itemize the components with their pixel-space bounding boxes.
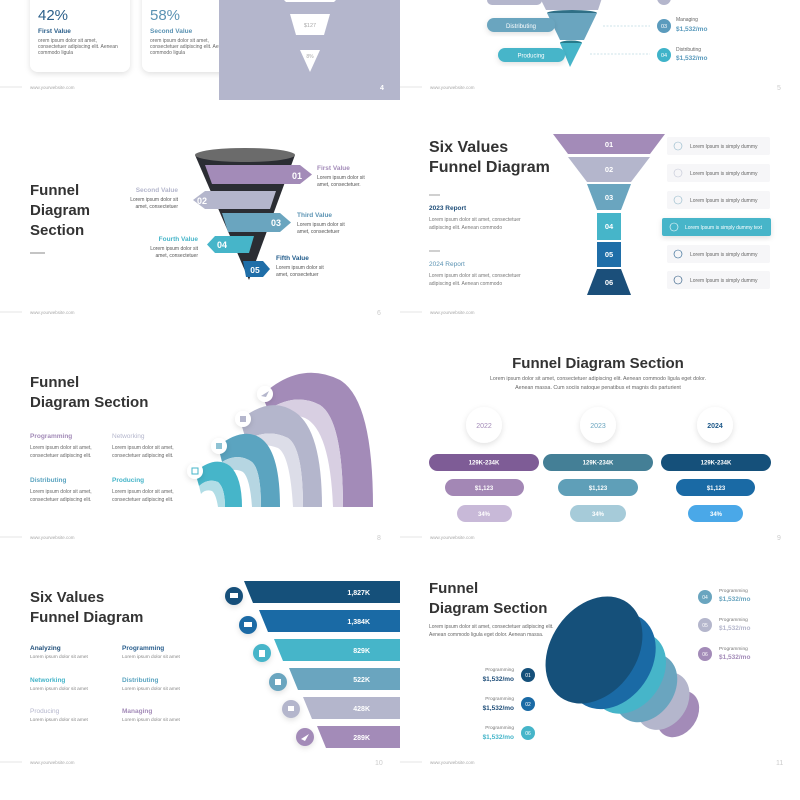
band 05: 05 <box>250 265 260 275</box>
arches <box>195 373 373 507</box>
labels: consectetuer adipiscing elit. <box>112 497 173 503</box>
title: Funnel Diagram Section <box>512 355 684 372</box>
bars: 289K <box>353 735 370 742</box>
title: Diagram <box>30 202 90 219</box>
pill: distributing: Distributing <box>506 24 536 30</box>
number circles: 05 <box>702 623 708 629</box>
card: first value: First Value <box>38 28 71 35</box>
slide 4: value cards <box>30 0 400 100</box>
panel: purple funnel <box>219 0 400 100</box>
footer 8: www.yourwebsite.com <box>30 535 75 540</box>
pills: 129K-234K <box>469 460 500 466</box>
number circles: 02 <box>525 702 531 708</box>
labels: Fifth Value <box>276 255 309 262</box>
labels: Lorem ipsum dolor sit amet <box>30 654 89 660</box>
title: Funnel Diagram <box>30 609 143 626</box>
pills: $1,123 <box>589 486 608 492</box>
footer 7 <box>400 310 475 315</box>
labels: amet, consectetuer <box>155 253 198 259</box>
pills <box>429 454 771 522</box>
title: Diagram Section <box>30 394 148 411</box>
year circles: 2023 <box>590 423 606 430</box>
number circles: 06 <box>525 731 531 737</box>
funnel segments: 05 <box>605 250 613 259</box>
labels: Lorem ipsum dolor sit amet, <box>30 489 92 495</box>
slide 5: funnel with pills <box>487 0 707 67</box>
labels: Programming <box>122 645 164 652</box>
footer 11: 11 <box>776 760 783 767</box>
footer 5 <box>400 85 781 92</box>
left items: Programming <box>485 696 514 702</box>
labels: Lorem ipsum dolor sit amet <box>122 717 181 723</box>
icons <box>187 386 273 479</box>
labels: Second Value <box>136 187 178 194</box>
item 03: 03 <box>661 24 667 30</box>
bars: 1,827K <box>347 590 370 597</box>
item 04 <box>657 47 707 62</box>
footer 8 <box>0 535 381 542</box>
labels: Distributing <box>122 677 158 684</box>
reports: Lorem ipsum dolor sit amet, consectetuer <box>429 217 521 223</box>
pills: $1,123 <box>707 486 726 492</box>
card: first value: orem ipsum dolor sit amet, <box>38 38 97 44</box>
bars: 522K <box>353 677 370 684</box>
list items <box>662 137 771 289</box>
pill: distributing <box>487 0 555 32</box>
card: first value: commodo ligula <box>38 50 73 56</box>
number circles <box>521 590 712 740</box>
title <box>429 139 550 176</box>
labels: First Value <box>317 165 350 172</box>
labels: Lorem ipsum dolor sit amet <box>30 686 89 692</box>
reports <box>429 195 521 287</box>
item 04: 04 <box>661 53 667 59</box>
labels: Programming <box>30 433 72 440</box>
title <box>30 589 143 626</box>
footer 5: www.yourwebsite.com <box>430 85 475 90</box>
title: Funnel <box>30 182 79 199</box>
footer 9: www.yourwebsite.com <box>430 535 475 540</box>
description: Aenean commodo ligula eget dolor. Aenean massa. <box>429 632 543 638</box>
bars: 428K <box>353 706 370 713</box>
left items: $1,532/mo <box>483 676 514 683</box>
item 04: Distributing <box>676 47 701 53</box>
slide 10 <box>30 581 400 748</box>
item 04: $1,532/mo <box>676 55 707 62</box>
title: Six Values <box>30 589 104 606</box>
funnel segments: 04 <box>605 222 614 231</box>
year circles: 2022 <box>476 423 492 430</box>
funnel segments: 01 <box>605 140 613 149</box>
left items <box>483 667 514 741</box>
labels: consectetuer adipiscing elit. <box>30 453 91 459</box>
funnel segments <box>553 134 665 295</box>
funnel segments: 02 <box>605 165 613 174</box>
reports: adipiscing elit. Aenean commodo <box>429 281 502 287</box>
footer 6: www.yourwebsite.com <box>30 310 75 315</box>
item 03 <box>657 0 707 33</box>
slide 6 <box>30 148 365 280</box>
funnel segments: 03 <box>605 193 613 202</box>
labels: consectetuer adipiscing elit. <box>112 453 173 459</box>
band 03 <box>222 213 291 232</box>
footer 4: www.yourwebsite.com <box>30 85 75 90</box>
labels: Producing <box>112 477 144 484</box>
band 04 <box>207 236 254 253</box>
labels: amet, consectetuer <box>297 229 340 235</box>
labels: Lorem ipsum dolor sit amet, <box>30 445 92 451</box>
description: Lorem ipsum dolor sit amet, consectetuer adipiscing elit. <box>429 624 554 630</box>
labels: Lorem ipsum dolor sit <box>130 197 179 203</box>
labels: Managing <box>122 708 152 715</box>
bars <box>244 581 400 748</box>
right items <box>719 588 750 661</box>
pills: 129K-234K <box>701 460 732 466</box>
slide 9 <box>429 355 771 522</box>
right items: Programming <box>719 617 748 623</box>
footer 9: 9 <box>777 535 781 542</box>
footer 4 <box>0 85 75 90</box>
reports: 2023 Report <box>429 205 467 212</box>
pills: 34% <box>710 512 723 518</box>
labels: Analyzing <box>30 645 61 652</box>
pill: producing <box>498 48 565 62</box>
panel: purple funnel: $127 <box>304 23 316 29</box>
bars: 1,384K <box>347 619 370 626</box>
year circles: 2024 <box>707 423 723 430</box>
labels: Networking <box>30 677 65 684</box>
list items: Lorem Ipsum is simply dummy <box>690 252 758 258</box>
band 04: 04 <box>217 240 227 250</box>
labels <box>30 433 174 503</box>
list items: Lorem Ipsum is simply dummy <box>690 278 758 284</box>
footer 11 <box>400 760 783 767</box>
right items: $1,532/mo <box>719 625 750 632</box>
band 02 <box>193 191 276 209</box>
footer 9 <box>400 535 781 542</box>
labels: amet, consectetuer <box>135 204 178 210</box>
year circles <box>466 407 733 443</box>
list items: Lorem Ipsum is simply dummy <box>690 171 758 177</box>
right items: Programming <box>719 646 748 652</box>
title: Funnel Diagram <box>429 159 550 176</box>
right items: $1,532/mo <box>719 654 750 661</box>
card: first value <box>30 0 130 72</box>
labels: Networking <box>112 433 145 440</box>
title <box>429 580 547 617</box>
labels: amet, consectetuer. <box>317 182 361 188</box>
band 05 <box>243 261 270 277</box>
footer 5: 5 <box>777 85 781 92</box>
slide 11 <box>429 578 750 745</box>
labels: Fourth Value <box>159 236 198 243</box>
3D funnel <box>526 578 708 745</box>
funnel segments: 06 <box>605 278 613 287</box>
card: second value <box>142 0 242 72</box>
left items: $1,532/mo <box>483 734 514 741</box>
list items: Lorem Ipsum is simply dummy <box>690 198 758 204</box>
left items: $1,532/mo <box>483 705 514 712</box>
labels: consectetuer adipiscing elit. <box>30 497 91 503</box>
card: first value: consectetuer adipiscing elit. Aenean <box>38 44 118 50</box>
item 03: Managing <box>676 17 698 23</box>
labels <box>30 645 181 723</box>
title: Six Values <box>429 139 508 156</box>
footer 6: 6 <box>377 310 381 317</box>
left items: Programming <box>485 725 514 731</box>
funnel body <box>195 148 295 280</box>
description <box>429 624 554 638</box>
band 02: 02 <box>197 196 207 206</box>
band 03: 03 <box>271 218 281 228</box>
labels: Lorem ipsum dolor sit <box>276 265 324 271</box>
footer 10: 10 <box>375 760 383 767</box>
panel: purple funnel: 4 <box>380 85 384 92</box>
reports: 2024 Report <box>429 261 465 268</box>
labels: Lorem ipsum dolor sit amet, <box>112 489 174 495</box>
labels: Lorem ipsum dolor sit amet, <box>112 445 174 451</box>
pills: 34% <box>592 512 605 518</box>
slide 8 <box>30 373 373 507</box>
number circles: 01 <box>525 673 531 679</box>
card: second value: 58% <box>150 7 180 24</box>
title <box>30 182 90 239</box>
card: second value: orem ipsum dolor sit amet, <box>150 38 209 44</box>
labels: Distributing <box>30 477 66 484</box>
icons <box>225 587 314 746</box>
pill: producing: Producing <box>517 54 545 60</box>
labels: Third Value <box>297 212 332 219</box>
footer 7: www.yourwebsite.com <box>430 310 475 315</box>
title: Funnel <box>429 580 478 597</box>
slide 7 <box>429 134 771 295</box>
pills: 34% <box>478 512 491 518</box>
pills: 129K-234K <box>583 460 614 466</box>
subtitle: Lorem ipsum dolor sit amet, consectetuer adipiscing elit. Aenean commodo ligula eget dolor. <box>490 376 706 382</box>
labels: Producing <box>30 708 60 715</box>
reports: Lorem ipsum dolor sit amet, consectetuer <box>429 273 521 279</box>
band 01 <box>205 165 312 184</box>
footer 10 <box>0 760 383 767</box>
title: Diagram Section <box>429 600 547 617</box>
labels: Lorem ipsum dolor sit <box>150 246 199 252</box>
right items: $1,532/mo <box>719 596 750 603</box>
card: second value: consectetuer adipiscing elit. Aenean <box>150 44 230 50</box>
labels <box>130 165 365 278</box>
list items: Lorem Ipsum is simply dummy <box>690 144 758 150</box>
footer 6 <box>0 310 381 317</box>
right items: Programming <box>719 588 748 594</box>
number circles: 06 <box>702 652 708 658</box>
card: first value: 42% <box>38 7 68 24</box>
panel: purple funnel: 8% <box>306 54 314 60</box>
item 03: $1,532/mo <box>676 26 707 33</box>
footer 11: www.yourwebsite.com <box>430 760 475 765</box>
labels: Lorem ipsum dolor sit amet <box>122 686 181 692</box>
reports: adipiscing elit. Aenean commodo <box>429 225 502 231</box>
card: second value: Second Value <box>150 28 193 35</box>
title: Section <box>30 222 84 239</box>
labels: amet, consectetuer <box>276 272 319 278</box>
footer 10: www.yourwebsite.com <box>30 760 75 765</box>
arrows <box>590 26 650 54</box>
title <box>30 374 148 411</box>
funnel segments <box>540 0 602 67</box>
title: Funnel <box>30 374 79 391</box>
pills: $1,123 <box>475 486 494 492</box>
bars: 829K <box>353 648 370 655</box>
subtitle <box>490 376 706 391</box>
labels: Lorem ipsum dolor sit <box>297 222 345 228</box>
labels: Lorem ipsum dolor sit amet <box>30 717 89 723</box>
footer 8: 8 <box>377 535 381 542</box>
card: second value: commodo ligula <box>150 50 185 56</box>
list items: Lorem Ipsum is simply dummy text <box>685 225 763 231</box>
subtitle: Aenean massa. Cum sociis natoque penatibus et magnis dis parturient <box>515 385 681 391</box>
band 01: 01 <box>292 171 302 181</box>
labels: Lorem ipsum dolor sit <box>317 175 365 181</box>
left items: Programming <box>485 667 514 673</box>
labels: Lorem ipsum dolor sit amet <box>122 654 181 660</box>
number circles: 04 <box>702 595 708 601</box>
